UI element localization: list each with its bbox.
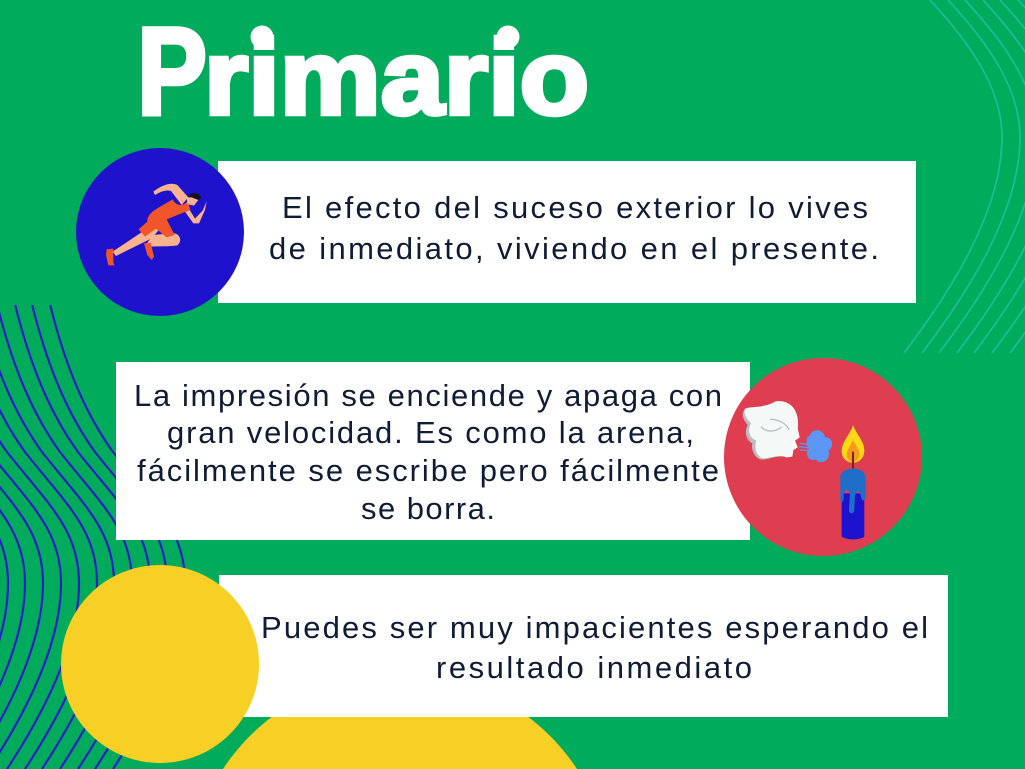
text box 2 [116, 362, 750, 540]
icon: candle [842, 493, 864, 539]
panel: impatience [61, 565, 948, 763]
circle: red [724, 358, 922, 556]
title: P [137, 3, 207, 141]
text box 3 [219, 575, 948, 717]
title: rimario [204, 19, 589, 137]
text: fleeting impression: La impresión se enciende y apaga con [134, 378, 722, 413]
text: immediate effect [269, 190, 879, 266]
text box 1 [218, 161, 916, 303]
text: impatience [261, 610, 928, 685]
circle: yellow [61, 565, 259, 763]
text: impatience: Puedes ser muy impacientes esperando el [261, 610, 928, 645]
wavy lines: left blue [0, 300, 185, 769]
text: fleeting impression: se borra. [361, 491, 495, 526]
text: impatience: resultado inmediato [436, 650, 752, 685]
text: immediate effect: de inmediato, viviendo en el presente. [269, 231, 879, 266]
panel: immediate effect [76, 148, 916, 316]
text: fleeting impression [134, 378, 722, 526]
panel: fleeting impression [116, 358, 922, 556]
icon: runner [106, 184, 207, 265]
text: fleeting impression: gran velocidad. Es como la arena, [167, 415, 694, 450]
text: fleeting impression: fácilmente se escribe pero fácilmente [137, 453, 719, 488]
bottom yellow semicircle [223, 674, 577, 769]
wavy lines: right teal [904, 0, 1025, 353]
icon: face [743, 401, 800, 460]
icon: blowing face and candle [743, 401, 866, 539]
circle: blue [76, 148, 244, 316]
icon: breath [806, 430, 832, 462]
title [137, 3, 589, 141]
text: immediate effect: El efecto del suceso exterior lo vives [282, 190, 868, 225]
